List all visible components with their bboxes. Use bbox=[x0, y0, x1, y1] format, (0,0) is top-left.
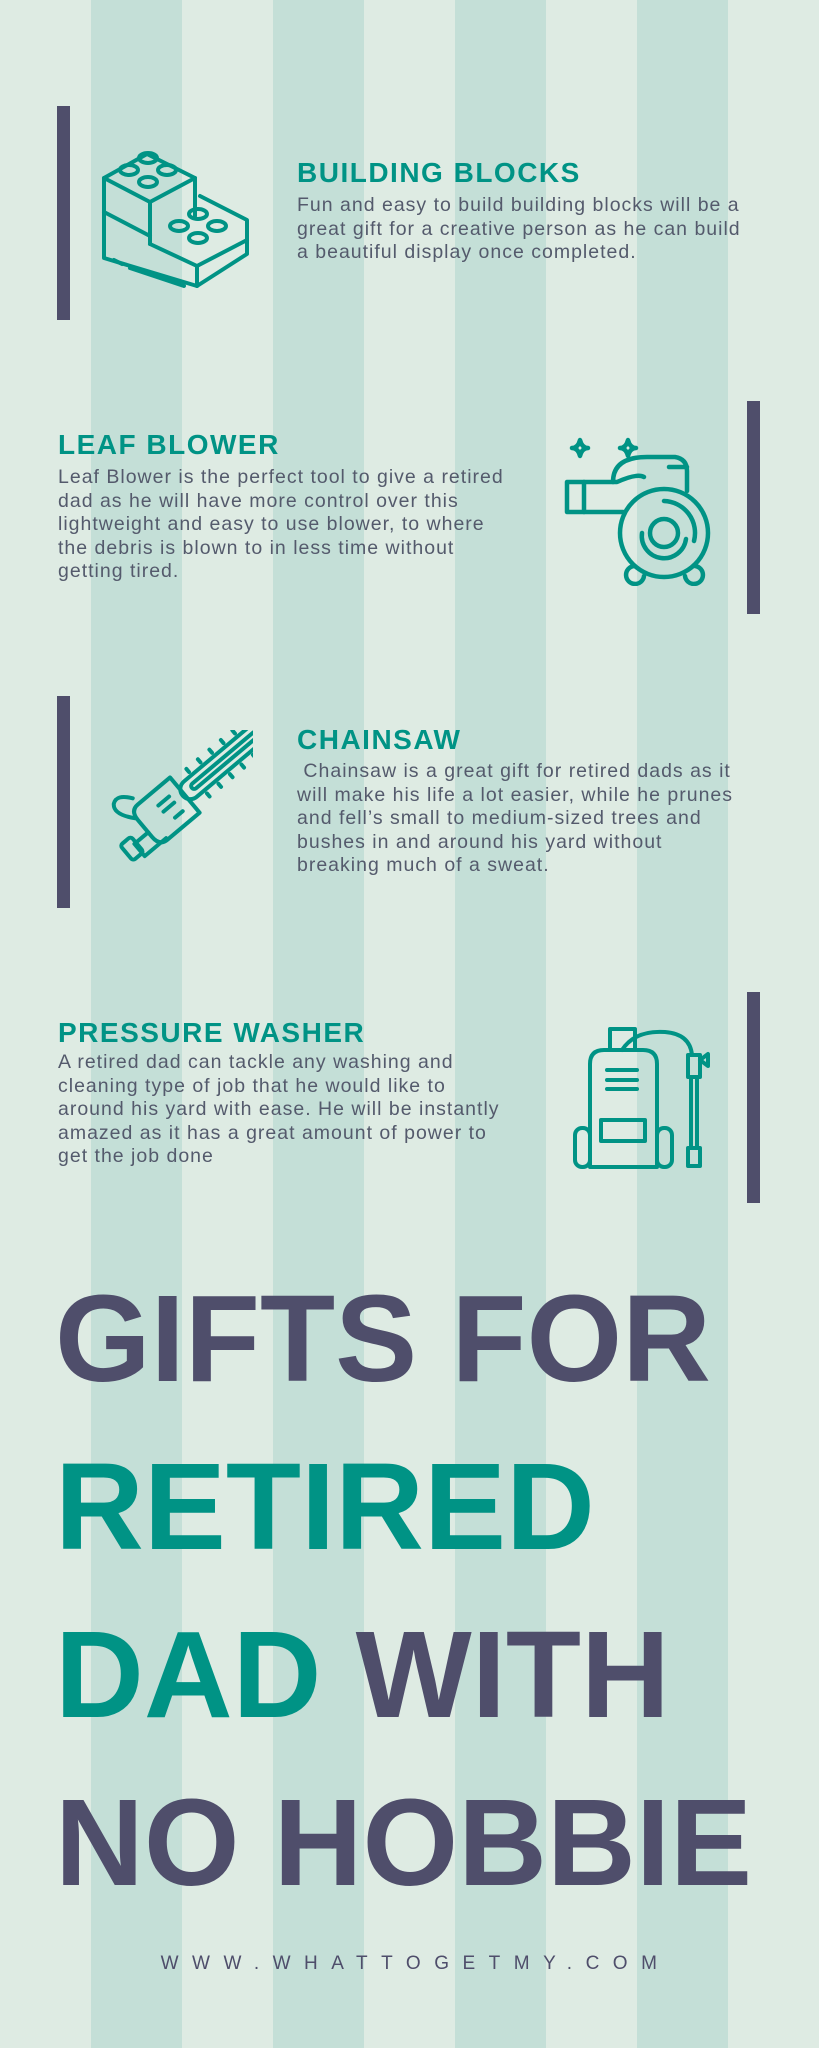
text: Fun and easy to build building blocks will be a great gift for a creative person as he can build a beautiful display once completed. bbox=[297, 194, 741, 263]
accent bar bbox=[747, 992, 760, 1203]
accent bar bbox=[747, 401, 760, 614]
icon: leaf blower bbox=[564, 438, 710, 586]
text: Chainsaw is a great gift for retired dads as it will make his life a lot easier, while he prunes and fell’s small to medium-sized trees and bushes in and around his yard without breaking much of a sweat. bbox=[297, 760, 733, 876]
icon: building blocks bbox=[102, 151, 250, 288]
text: A retired dad can tackle any washing and cleaning type of job that he would like to around his yard with ease. He will be instantly amazed as it has a great amount of power to get the job done bbox=[58, 1051, 500, 1167]
text: Leaf Blower is the perfect tool to give a retired dad as he will have more control over this lightweight and easy to use blower, to where the debris is blown to in less time without getting tired. bbox=[58, 466, 504, 582]
panel: leaf blower bbox=[58, 401, 760, 614]
icon: pressure washer bbox=[573, 1027, 710, 1169]
panel: pressure washer bbox=[58, 992, 760, 1203]
title: RETIRED bbox=[55, 1439, 595, 1576]
panel: chainsaw bbox=[57, 696, 733, 908]
accent bar bbox=[57, 696, 70, 908]
title: GIFTS FOR bbox=[55, 1271, 711, 1408]
title bbox=[55, 1271, 752, 1912]
heading: CHAINSAW bbox=[297, 724, 461, 755]
heading: BUILDING BLOCKS bbox=[297, 157, 581, 188]
heading: LEAF BLOWER bbox=[58, 429, 280, 460]
footer url: WWW.WHATTOGETMY.COM bbox=[161, 1953, 670, 1974]
icon: chainsaw bbox=[112, 730, 253, 862]
accent bar bbox=[57, 106, 70, 320]
title: DAD WITH bbox=[55, 1607, 670, 1744]
panel: building blocks bbox=[57, 106, 741, 320]
title: NO HOBBIE bbox=[55, 1775, 752, 1912]
heading: PRESSURE WASHER bbox=[58, 1017, 365, 1048]
